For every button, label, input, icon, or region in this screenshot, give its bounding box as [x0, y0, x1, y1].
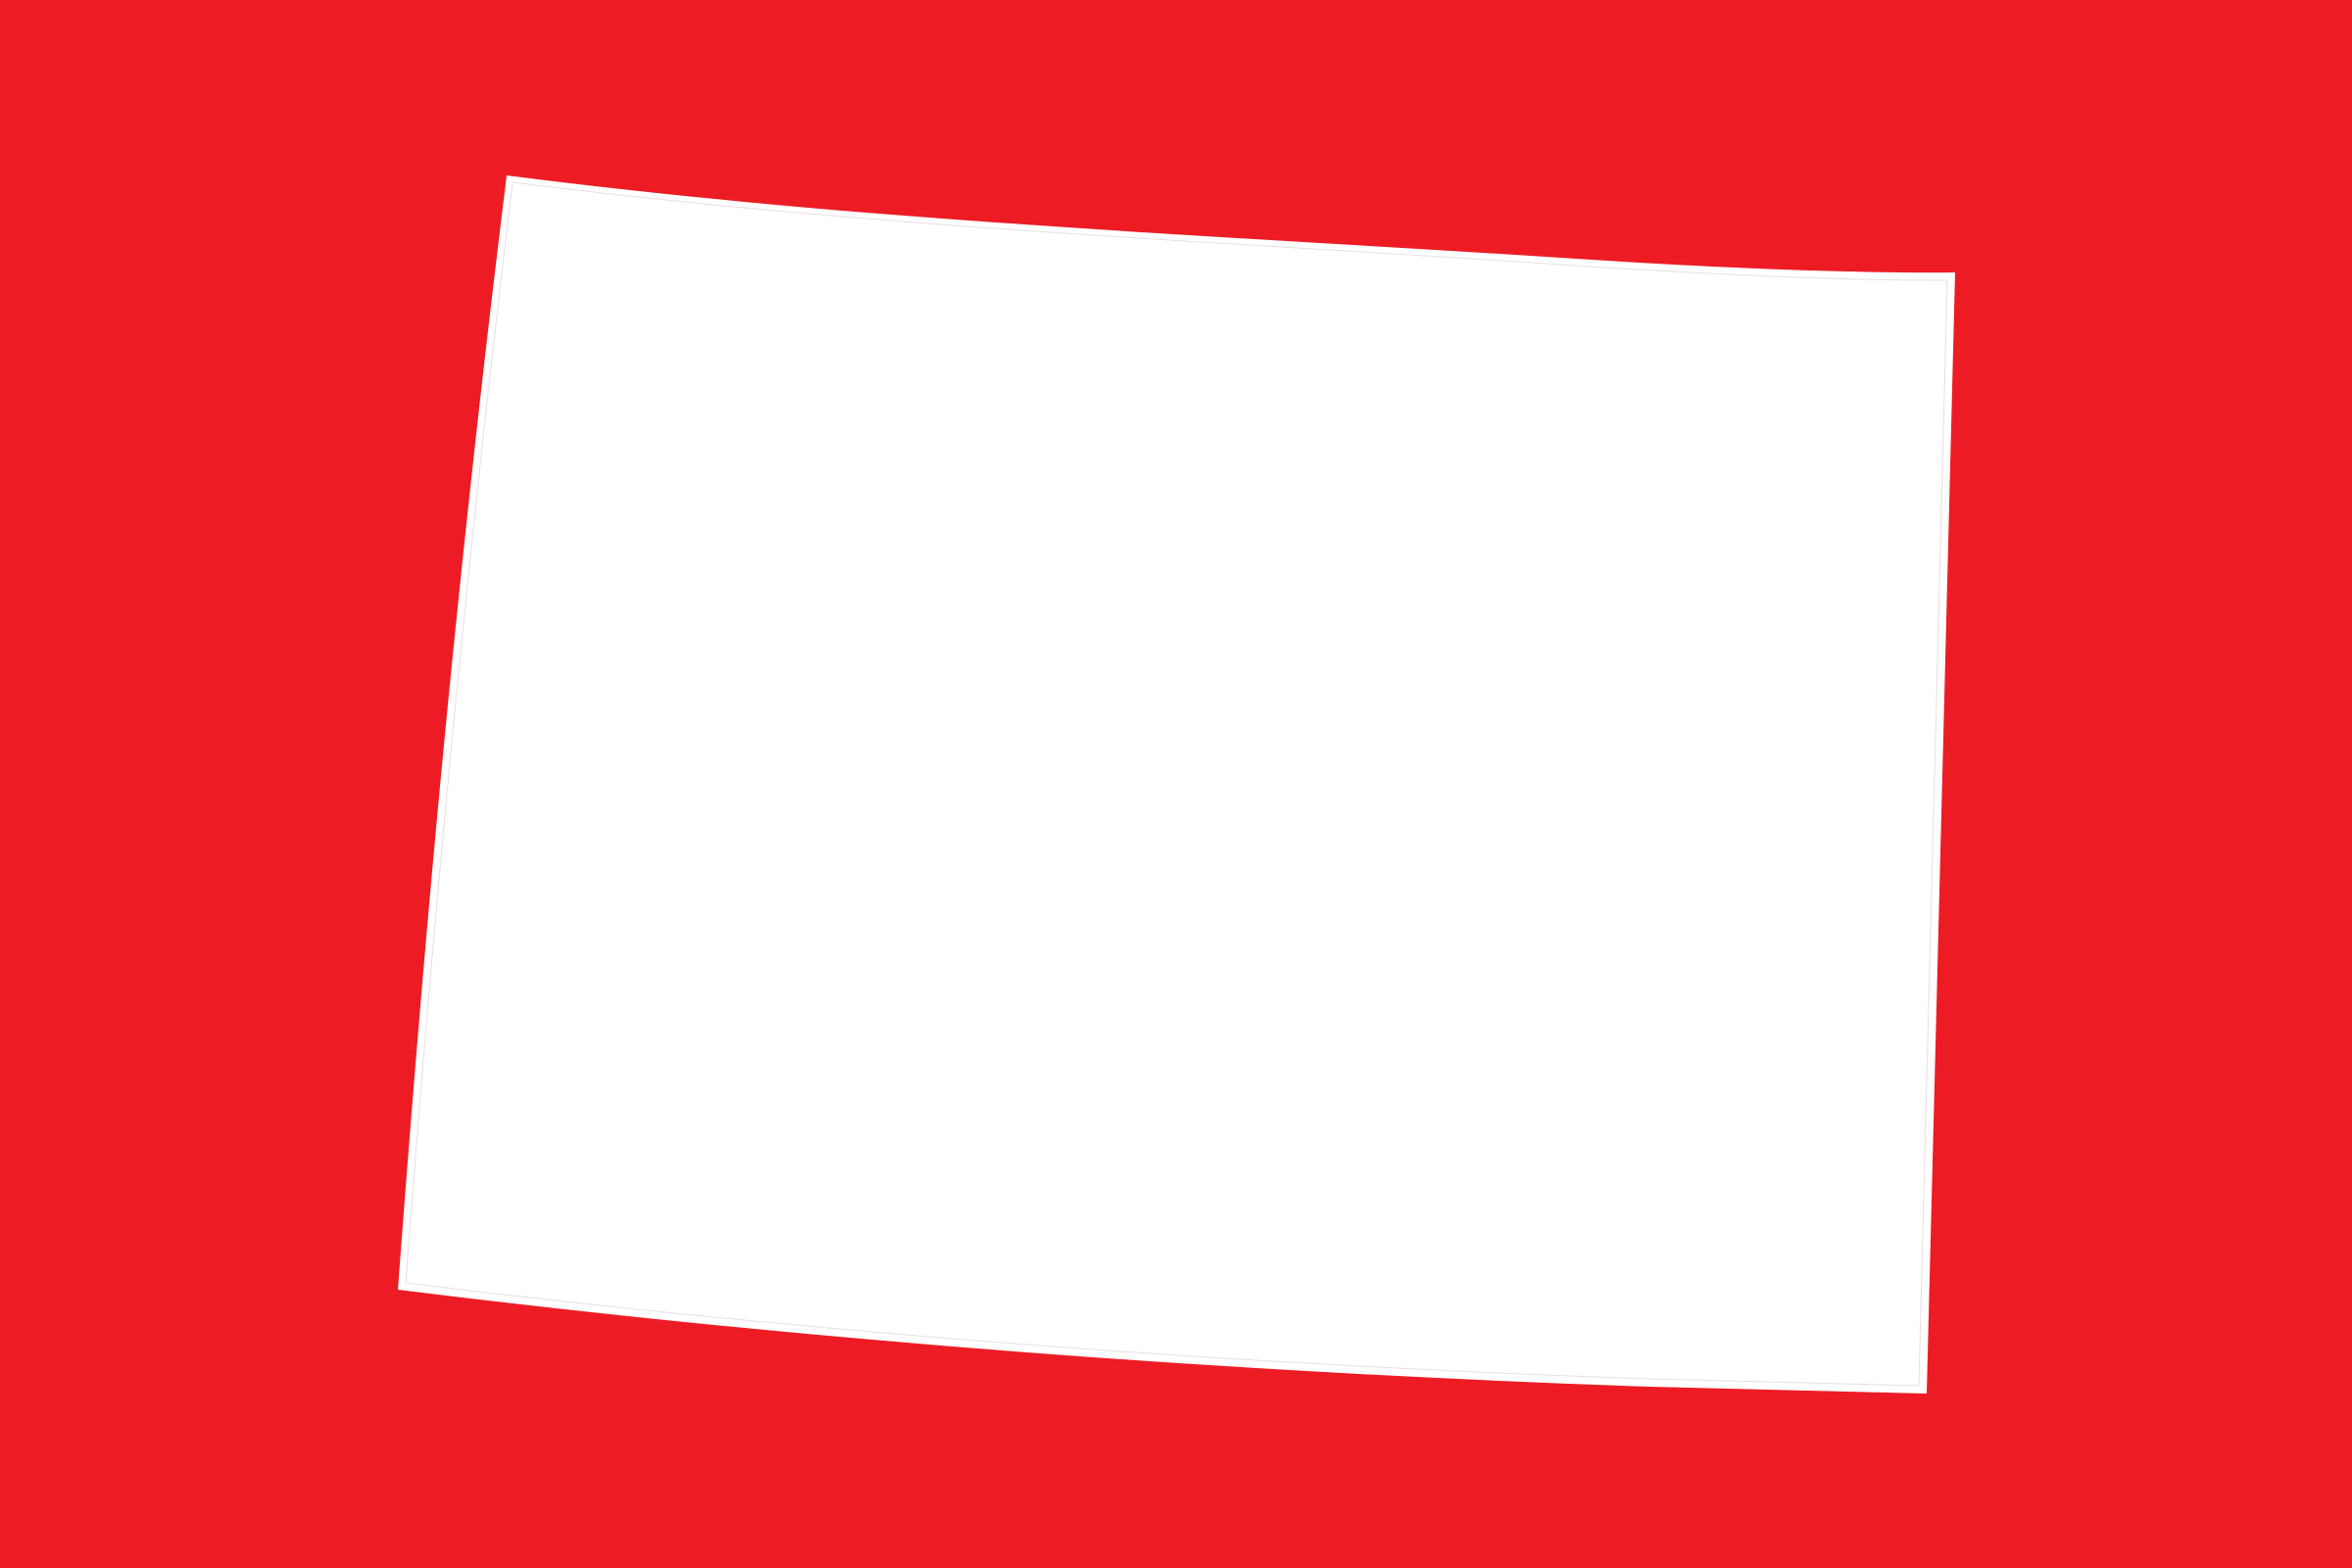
map shape: white state outline [398, 175, 1955, 1394]
